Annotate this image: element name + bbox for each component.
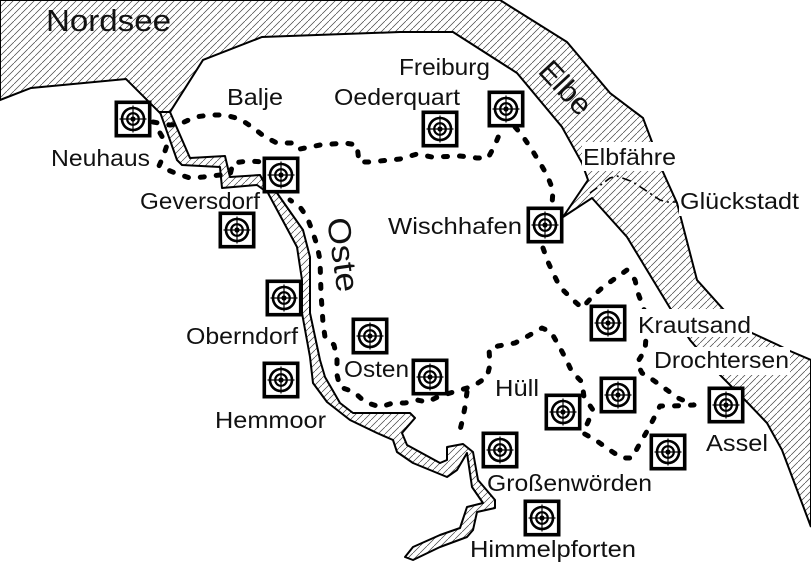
icon: target Großenwörden <box>483 433 517 467</box>
icon: target Himmelpforten <box>525 501 559 535</box>
label: Himmelpforten: Himmelpforten <box>470 536 636 562</box>
label: Krautsand: Krautsand <box>638 312 751 338</box>
label: Osten: Osten <box>344 356 409 382</box>
label: Großenwörden: Großenwörden <box>487 470 652 496</box>
label: Freiburg: Freiburg <box>399 54 490 80</box>
label: Assel: Assel <box>706 430 768 456</box>
dashed route network <box>153 115 694 458</box>
icon: target Oberndorf north <box>267 281 301 315</box>
label: Elbfähre: Elbfähre <box>583 144 676 170</box>
icon: target Wischhafen <box>528 208 562 242</box>
label: Nordsee: Nordsee <box>46 3 171 38</box>
icon: target Assel <box>709 388 743 422</box>
icon: target southeast <box>651 435 685 469</box>
label: Elbe: Elbe <box>532 54 598 122</box>
icon: target Osten west <box>353 319 387 353</box>
label: Geversdorf: Geversdorf <box>140 188 260 214</box>
label: Hemmoor: Hemmoor <box>215 407 326 433</box>
label: Glückstadt: Glückstadt <box>680 188 799 214</box>
label: Hüll: Hüll <box>495 375 539 401</box>
label: Oste: Oste <box>320 215 366 294</box>
icon: target Hemmoor <box>264 363 298 397</box>
icon: target Freiburg <box>489 92 523 126</box>
label: Oberndorf: Oberndorf <box>186 323 298 349</box>
icon: target Hüll <box>546 395 580 429</box>
ferry route Elbe <box>590 176 677 202</box>
label: Wischhafen: Wischhafen <box>388 213 522 239</box>
label: Neuhaus: Neuhaus <box>51 145 150 171</box>
icon: target Krautsand <box>591 306 625 340</box>
icon: target Geversdorf south <box>220 213 254 247</box>
label: Oederquart: Oederquart <box>334 84 460 110</box>
Oste river <box>160 112 495 560</box>
label: Balje: Balje <box>227 84 283 110</box>
label: Drochtersen: Drochtersen <box>654 347 789 373</box>
icon: target Neuhaus <box>116 102 150 136</box>
icon: target Geversdorf north <box>264 158 298 192</box>
icon: target Drochtersen <box>601 378 635 412</box>
icon: target Osten <box>413 360 447 394</box>
icon: target Oederquart <box>423 112 457 146</box>
